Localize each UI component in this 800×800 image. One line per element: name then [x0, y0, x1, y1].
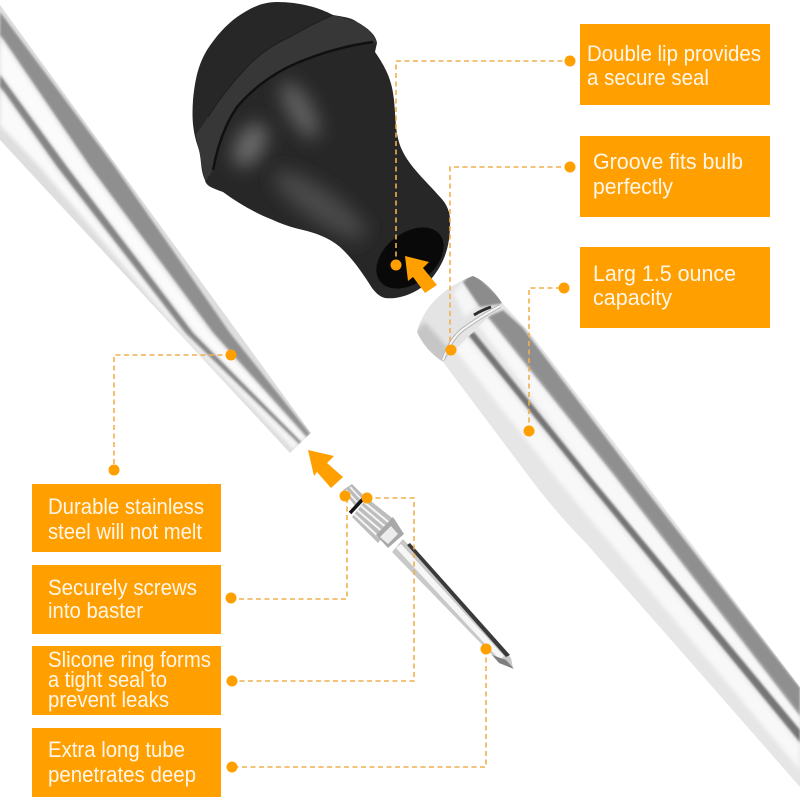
hub — [376, 517, 404, 548]
callout: double lip: a secure seal — [587, 65, 709, 90]
callout: stainless steel: Durable stainless — [48, 494, 204, 519]
callout: screws into baster: into baster — [48, 598, 143, 623]
callout: silicone ring: a tight seal to — [48, 667, 167, 692]
callout: stainless steel — [32, 484, 221, 552]
callout: silicone ring: Slicone ring forms — [48, 647, 211, 672]
rubber bulb — [193, 2, 455, 301]
callout: screws into baster: Securely screws — [48, 575, 197, 600]
leader: capacity — [524, 282, 570, 436]
bulb mouth — [376, 228, 444, 288]
arrow: needle into tube — [308, 450, 343, 488]
callout: silicone ring: prevent leaks — [48, 687, 169, 712]
callout: stainless steel: steel will not melt — [48, 519, 202, 544]
callout: long tube — [32, 728, 221, 797]
callout: long tube: Extra long tube — [48, 737, 185, 762]
knurled body — [352, 498, 396, 543]
callout: groove: perfectly — [593, 174, 673, 199]
callout: double lip — [580, 24, 770, 105]
right tube: baster barrel — [410, 272, 800, 787]
callout: groove — [580, 136, 770, 217]
callout: screws into baster — [32, 565, 221, 634]
callout: long tube: penetrates deep — [48, 762, 196, 787]
silicone ring — [350, 499, 363, 513]
needle shaft — [392, 539, 513, 668]
leader: screws — [226, 490, 350, 604]
callout: capacity — [580, 247, 770, 328]
needle injector — [343, 484, 514, 669]
collar groove — [443, 306, 500, 360]
bulb sealing lip — [196, 15, 377, 182]
leader: silicone ring — [226, 492, 414, 686]
callout: capacity: capacity — [593, 285, 672, 310]
leader: double lip — [390, 56, 576, 270]
arrow: bulb onto barrel — [405, 256, 437, 293]
needle thread — [343, 484, 364, 506]
callout: capacity: Larg 1.5 ounce — [593, 261, 736, 286]
callout: groove: Groove fits bulb — [593, 149, 743, 174]
barrel collar — [417, 276, 502, 362]
leader: stainless steel — [108, 350, 236, 476]
callout: double lip: Double lip provides — [587, 41, 761, 66]
callout: silicone ring — [32, 646, 221, 715]
leader: groove — [446, 162, 576, 356]
left tube: tapered stainless steel — [0, 5, 311, 453]
leader: long tube — [226, 644, 492, 772]
